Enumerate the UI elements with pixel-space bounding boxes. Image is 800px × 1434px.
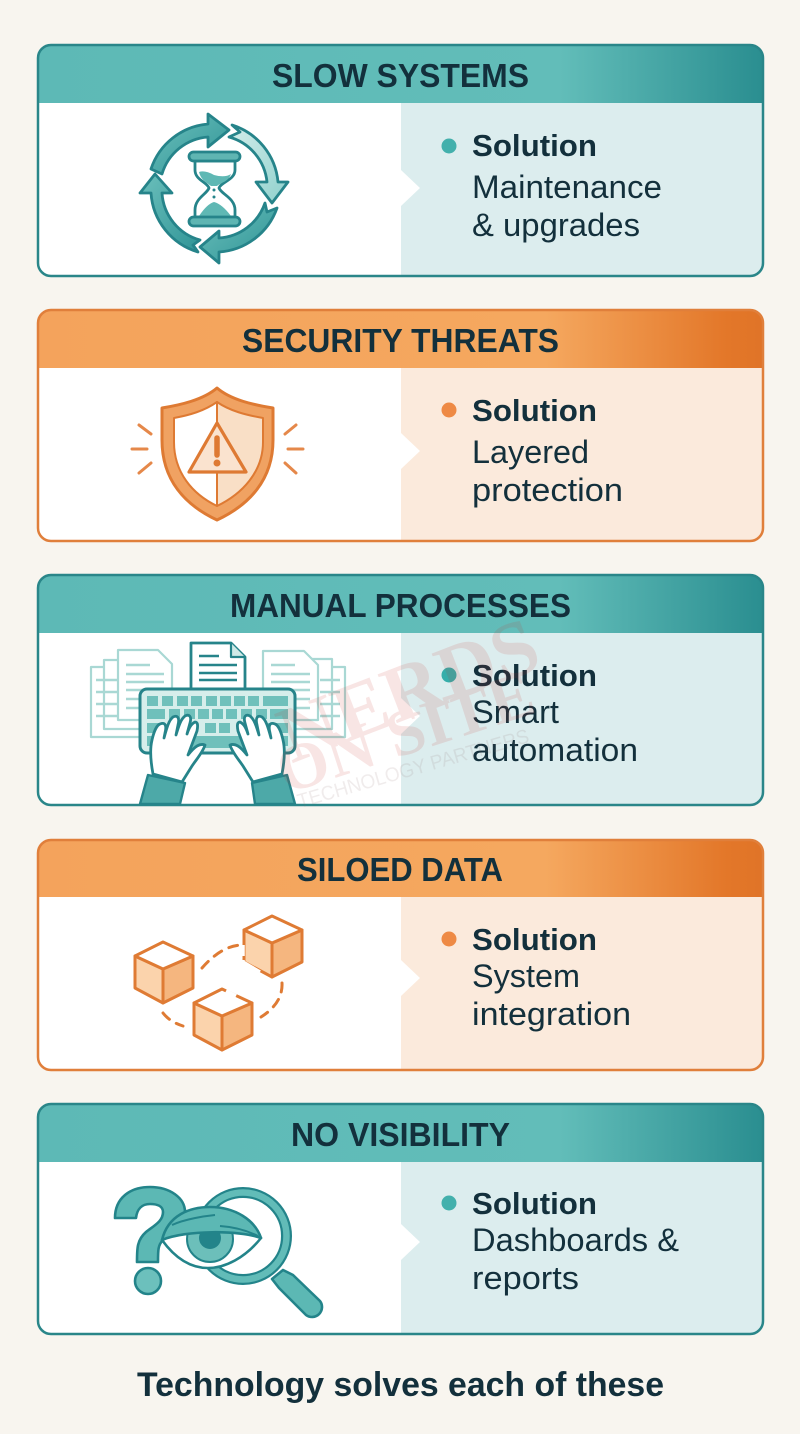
solution text: protection bbox=[472, 472, 623, 508]
arrow: chevron bbox=[401, 1224, 420, 1260]
solution label: Solution bbox=[472, 658, 597, 693]
solution label: Solution bbox=[472, 1186, 597, 1221]
solution label: Solution bbox=[472, 393, 597, 428]
panel: slow systems bbox=[38, 45, 763, 276]
heading: no visibility: NO VISIBILITY bbox=[291, 1116, 510, 1153]
heading: siloed data: SILOED DATA bbox=[297, 851, 503, 888]
solution text: Dashboards & bbox=[472, 1222, 679, 1258]
solution label: Solution bbox=[472, 922, 597, 957]
icon bullet bbox=[442, 138, 456, 154]
icon: documents and typing hands bbox=[91, 643, 345, 804]
solution text: Maintenance bbox=[472, 169, 662, 205]
solution label: Solution bbox=[472, 128, 597, 163]
arrow: chevron bbox=[401, 433, 420, 469]
icon: hourglass in cycle arrows bbox=[140, 114, 288, 263]
panel: manual processes bbox=[38, 575, 763, 805]
icon bullet bbox=[442, 1196, 456, 1210]
solution text: reports bbox=[472, 1260, 579, 1296]
watermark: ON SITE bbox=[268, 657, 543, 808]
panel: no visibility bbox=[38, 1104, 763, 1334]
heading: slow systems: SLOW SYSTEMS bbox=[272, 57, 529, 94]
heading: manual processes: MANUAL PROCESSES bbox=[230, 587, 571, 624]
arrow: chevron bbox=[401, 170, 420, 206]
arrow: chevron bbox=[401, 960, 420, 996]
footer text: Technology solves each of these bbox=[137, 1366, 664, 1404]
panel: security threats bbox=[38, 310, 763, 541]
icon bullet bbox=[442, 668, 456, 682]
icon: disconnected cubes bbox=[135, 916, 302, 1050]
solution text: Layered bbox=[472, 434, 589, 470]
heading: security threats: SECURITY THREATS bbox=[242, 322, 559, 359]
icon: shield with warning bbox=[132, 388, 303, 520]
icon: question mark, eye and magnifier bbox=[115, 1187, 322, 1317]
solution text: & upgrades bbox=[472, 207, 640, 243]
watermark: TECHNOLOGY PARTNERS bbox=[295, 726, 532, 813]
panel: siloed data bbox=[38, 840, 763, 1070]
solution text: Smart bbox=[472, 694, 559, 730]
icon bullet bbox=[442, 402, 456, 418]
icon bullet bbox=[442, 932, 456, 946]
arrow: chevron bbox=[401, 698, 420, 734]
solution text: integration bbox=[472, 996, 631, 1032]
solution text: System bbox=[472, 958, 580, 994]
watermark: NERDS bbox=[266, 601, 551, 780]
solution text: automation bbox=[472, 732, 638, 768]
